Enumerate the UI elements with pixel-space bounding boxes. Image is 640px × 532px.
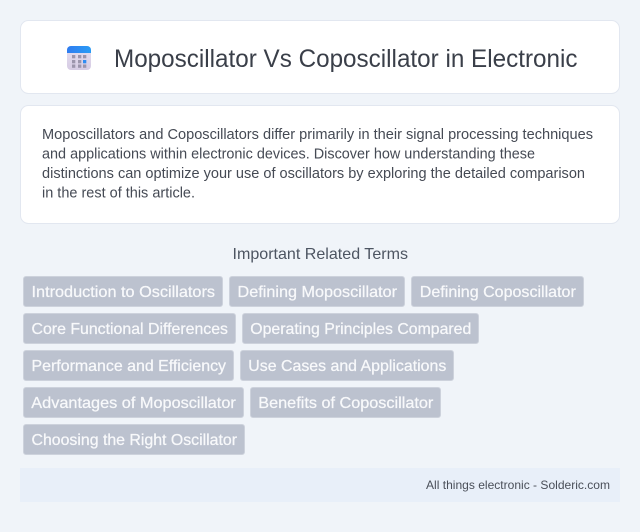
tag: defining coposcillator: Defining Coposcillator (420, 284, 576, 301)
intro text: in the rest of this article. (42, 186, 195, 202)
intro text: Moposcillators and Coposcillators differ primarily in their signal processing techniques (42, 127, 593, 143)
tag: defining moposcillator: Defining Moposcillator (238, 284, 398, 301)
title: Moposcillator Vs Coposcillator in Electronic (114, 45, 578, 73)
section heading: Important Related Terms (232, 246, 408, 263)
tag: core differences (24, 314, 236, 344)
footer text: All things electronic - Solderic.com (426, 478, 610, 492)
intro text: distinctions can optimize your use of oscillators by exploring the detailed comparison (42, 166, 585, 182)
tag list (24, 276, 584, 454)
header panel (20, 20, 620, 94)
tag: core differences: Core Functional Differences (32, 321, 228, 338)
intro text: and applications within electronic devices. Discover how understanding these (42, 146, 535, 162)
tag: advantages: Advantages of Moposcillator (31, 395, 236, 412)
tag: performance: Performance and Efficiency (32, 358, 226, 375)
intro text (42, 127, 593, 202)
tag: choosing: Choosing the Right Oscillator (32, 432, 238, 449)
tag: defining moposcillator (230, 276, 404, 306)
tag: introduction: Introduction to Oscillators (32, 284, 215, 301)
icon: calendar (67, 46, 91, 70)
tag: use cases: Use Cases and Applications (248, 358, 446, 375)
tag: performance (24, 350, 234, 380)
tag: operating principles: Operating Principles Compared (250, 321, 471, 338)
tag: operating principles (242, 314, 478, 344)
tag: benefits: Benefits of Coposcillator (258, 395, 434, 412)
intro panel (20, 106, 620, 224)
footer bar (20, 468, 620, 502)
tag: advantages (24, 388, 244, 418)
tag: choosing (24, 424, 244, 454)
tag: benefits (250, 388, 440, 418)
tag: use cases (240, 350, 454, 380)
tag: defining coposcillator (412, 276, 584, 306)
tag: introduction (24, 276, 222, 306)
